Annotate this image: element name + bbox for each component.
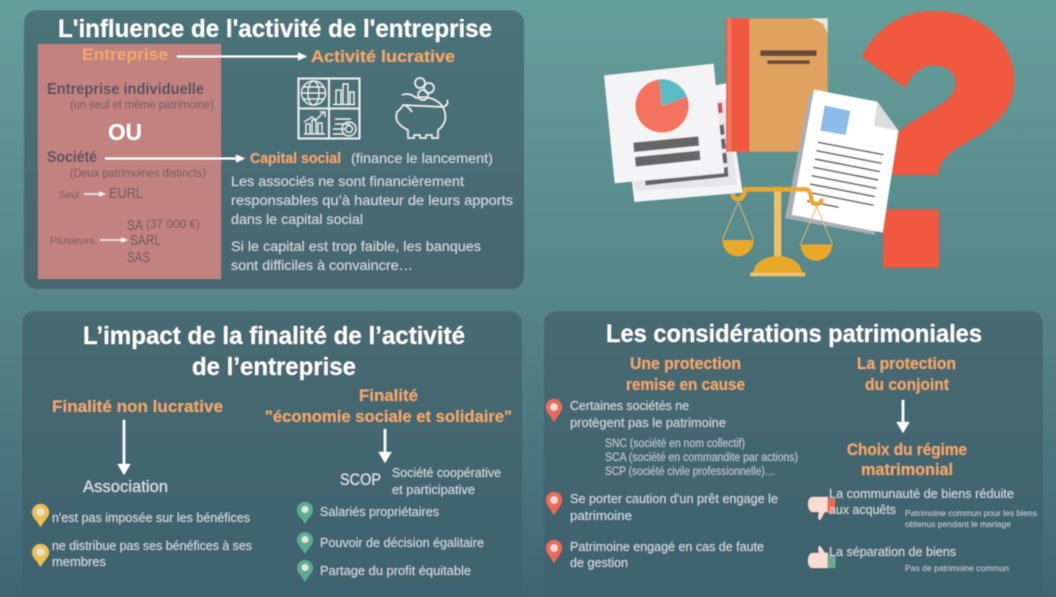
- label: une protection remise en cause: Une protection: [630, 354, 741, 373]
- illustration: documents, book, scales, question mark: [604, 11, 1014, 276]
- text: responsabilité associés: [231, 173, 513, 227]
- text: partage du profit: Partage du profit équitable: [320, 563, 471, 578]
- text: bénéfices non imposés: n'est pas imposée sur les bénéfices: [52, 510, 250, 525]
- arrow: to SCOP: [378, 429, 392, 463]
- heading: influence: L'influence de l'activité de l'entreprise: [58, 15, 492, 43]
- text: responsabilité associés: Les associés ne sont financièrement: [231, 173, 464, 189]
- text: SNC SCA SCP: SCP (société civile professionnelle)…: [605, 466, 775, 478]
- text: entreprise individuelle: Entreprise individuelle: [47, 81, 204, 98]
- text: bénéfices non distribués: [52, 538, 252, 569]
- text: caution: Se porter caution d'un prêt engage le: [570, 491, 778, 506]
- text: séparation de biens: La séparation de biens: [829, 544, 956, 559]
- text: société: [47, 149, 206, 180]
- icon: red pin 2: [546, 492, 562, 515]
- icon: business grid: [298, 78, 360, 138]
- text: seul EURL: Seul: [59, 189, 79, 201]
- text: entreprise individuelle: [47, 81, 214, 112]
- text: certaines sociétés: [570, 398, 726, 430]
- text: SNC SCA SCP: [605, 438, 798, 478]
- text: faute de gestion: Patrimoine engagé en cas de faute: [570, 539, 764, 554]
- label: la protection du conjoint: du conjoint: [865, 375, 949, 394]
- text: SNC SCA SCP: SNC (société en nom collectif): [605, 438, 745, 450]
- text: plusieurs SA SARL SAS: [50, 217, 200, 266]
- text: plusieurs SA SARL SAS: SA: [127, 217, 143, 234]
- icon: book: [726, 18, 828, 152]
- text: société coopérative et participative: et participative: [392, 483, 475, 497]
- label: la protection du conjoint: [857, 354, 956, 394]
- text: caution: [570, 491, 778, 523]
- text: capital trop faible: [231, 238, 481, 273]
- icon: front chart sheet: [604, 64, 724, 183]
- text: seul EURL: EURL: [109, 185, 143, 202]
- text: faute de gestion: [570, 539, 764, 570]
- text: salariés propriétaires: Salariés propriétaires: [320, 504, 439, 519]
- label: finalité économie sociale et solidaire: Finalité: [359, 386, 418, 405]
- text: OU: OU: [108, 119, 142, 145]
- arrow: entreprise to activité: [177, 52, 307, 60]
- text: communauté de biens: La communauté de biens réduite: [829, 486, 1014, 501]
- text: entreprise individuelle: (un seul et même patrimoine): [70, 100, 214, 112]
- text: plusieurs SA SARL SAS: SAS: [127, 249, 150, 266]
- label: la protection du conjoint: La protection: [857, 354, 956, 373]
- text: bénéfices non distribués: membres: [52, 554, 106, 569]
- text: faute de gestion: de gestion: [570, 555, 628, 570]
- heading: impact: de l’entreprise: [192, 353, 356, 381]
- icon: question mark: [862, 11, 1014, 268]
- heading: impact: L’impact de la finalité de l’activité: [83, 322, 465, 350]
- text: patrimoine commun note: Patrimoine commun pour les biens: [905, 508, 1037, 518]
- text: responsabilité associés: dans le capital social: [231, 211, 363, 227]
- heading: considérations: Les considérations patrimoniales: [606, 320, 982, 348]
- text: société coopérative et participative: Société coopérative: [392, 466, 501, 480]
- icon: balance scales: [722, 187, 832, 276]
- icon: green pin 2: [297, 532, 313, 554]
- arrow: société to capital social: [105, 154, 245, 162]
- label: une protection remise en cause: [626, 354, 745, 394]
- text: capital trop faible: sont difficiles à convaincre…: [231, 257, 413, 273]
- text: pas de patrimoine commun: Pas de patrimoine commun: [905, 563, 1009, 573]
- text: communauté de biens: [829, 486, 1014, 517]
- arrow: to association: [118, 420, 130, 475]
- text: caution: patrimoine: [570, 508, 632, 523]
- panel: considérations patrimoniales: [544, 311, 1043, 597]
- heading: impact: [83, 322, 465, 381]
- text: SNC SCA SCP: SCA (société en commandite par actions): [605, 452, 798, 464]
- icon: back sheet: [632, 83, 743, 202]
- icon: yellow pin 2: [32, 544, 49, 567]
- label: choix du régime matrimonial: [847, 440, 967, 479]
- text: pouvoir de décision: Pouvoir de décision égalitaire: [320, 535, 484, 550]
- text: société: Société: [47, 149, 97, 166]
- icon: yellow pin 1: [32, 504, 49, 527]
- icon: green pin 1: [297, 502, 313, 524]
- icon: thumb up: [808, 546, 836, 568]
- label: finalité économie sociale et solidaire: "économie sociale et solidaire": [265, 407, 512, 426]
- label: une protection remise en cause: remise en cause: [626, 375, 745, 394]
- text: société: (Deux patrimoines distincts): [70, 168, 206, 180]
- label: capital social: Capital social: [250, 150, 341, 167]
- label: choix du régime matrimonial: matrimonial: [861, 460, 953, 479]
- text: SCOP: SCOP: [340, 470, 381, 489]
- text: responsabilité associés: responsables qu’à hauteur de leurs apports: [231, 192, 513, 208]
- text: plusieurs SA SARL SAS: (37 000 €): [146, 217, 200, 231]
- text: communauté de biens: aux acquêts: [829, 502, 896, 517]
- label: finalité économie sociale et solidaire: [265, 386, 512, 426]
- icon: thumb down: [808, 497, 835, 520]
- icon: piggy bank: [396, 78, 448, 138]
- text: association: Association: [83, 477, 168, 496]
- text: capital trop faible: Si le capital est trop faible, les banques: [231, 238, 481, 254]
- text: finance le lancement: (finance le lancement): [351, 150, 493, 166]
- text: patrimoine commun note: obtenus pendant le mariage: [905, 519, 1011, 529]
- text: bénéfices non distribués: ne distribue pas ses bénéfices à ses: [52, 538, 252, 553]
- label: finalité non lucrative: Finalité non lucrative: [52, 397, 223, 416]
- arrow: to régime matrimonial: [896, 400, 910, 433]
- label: Entreprise: Entreprise: [82, 45, 168, 64]
- text: seul EURL: [59, 185, 143, 202]
- icon: green pin 3: [297, 560, 313, 582]
- panel: influence de l'activité: [24, 10, 524, 289]
- text: plusieurs SA SARL SAS: Plusieurs: [50, 235, 95, 247]
- text: certaines sociétés: protègent pas le patrimoine: [570, 415, 726, 430]
- text: certaines sociétés: Certaines sociétés ne: [570, 398, 689, 413]
- label: choix du régime matrimonial: Choix du régime: [847, 440, 967, 459]
- icon: red pin 1: [546, 399, 562, 422]
- panel: impact de la finalité: [22, 311, 522, 597]
- label: activité lucrative: Activité lucrative: [311, 47, 455, 66]
- icon: text document: [785, 90, 898, 235]
- text: patrimoine commun note: [905, 508, 1037, 529]
- icon: red pin 3: [546, 540, 562, 563]
- text: société coopérative et participative: [392, 466, 501, 497]
- text: plusieurs SA SARL SAS: SARL: [130, 232, 161, 249]
- panel: red box forms of enterprise: [38, 44, 221, 279]
